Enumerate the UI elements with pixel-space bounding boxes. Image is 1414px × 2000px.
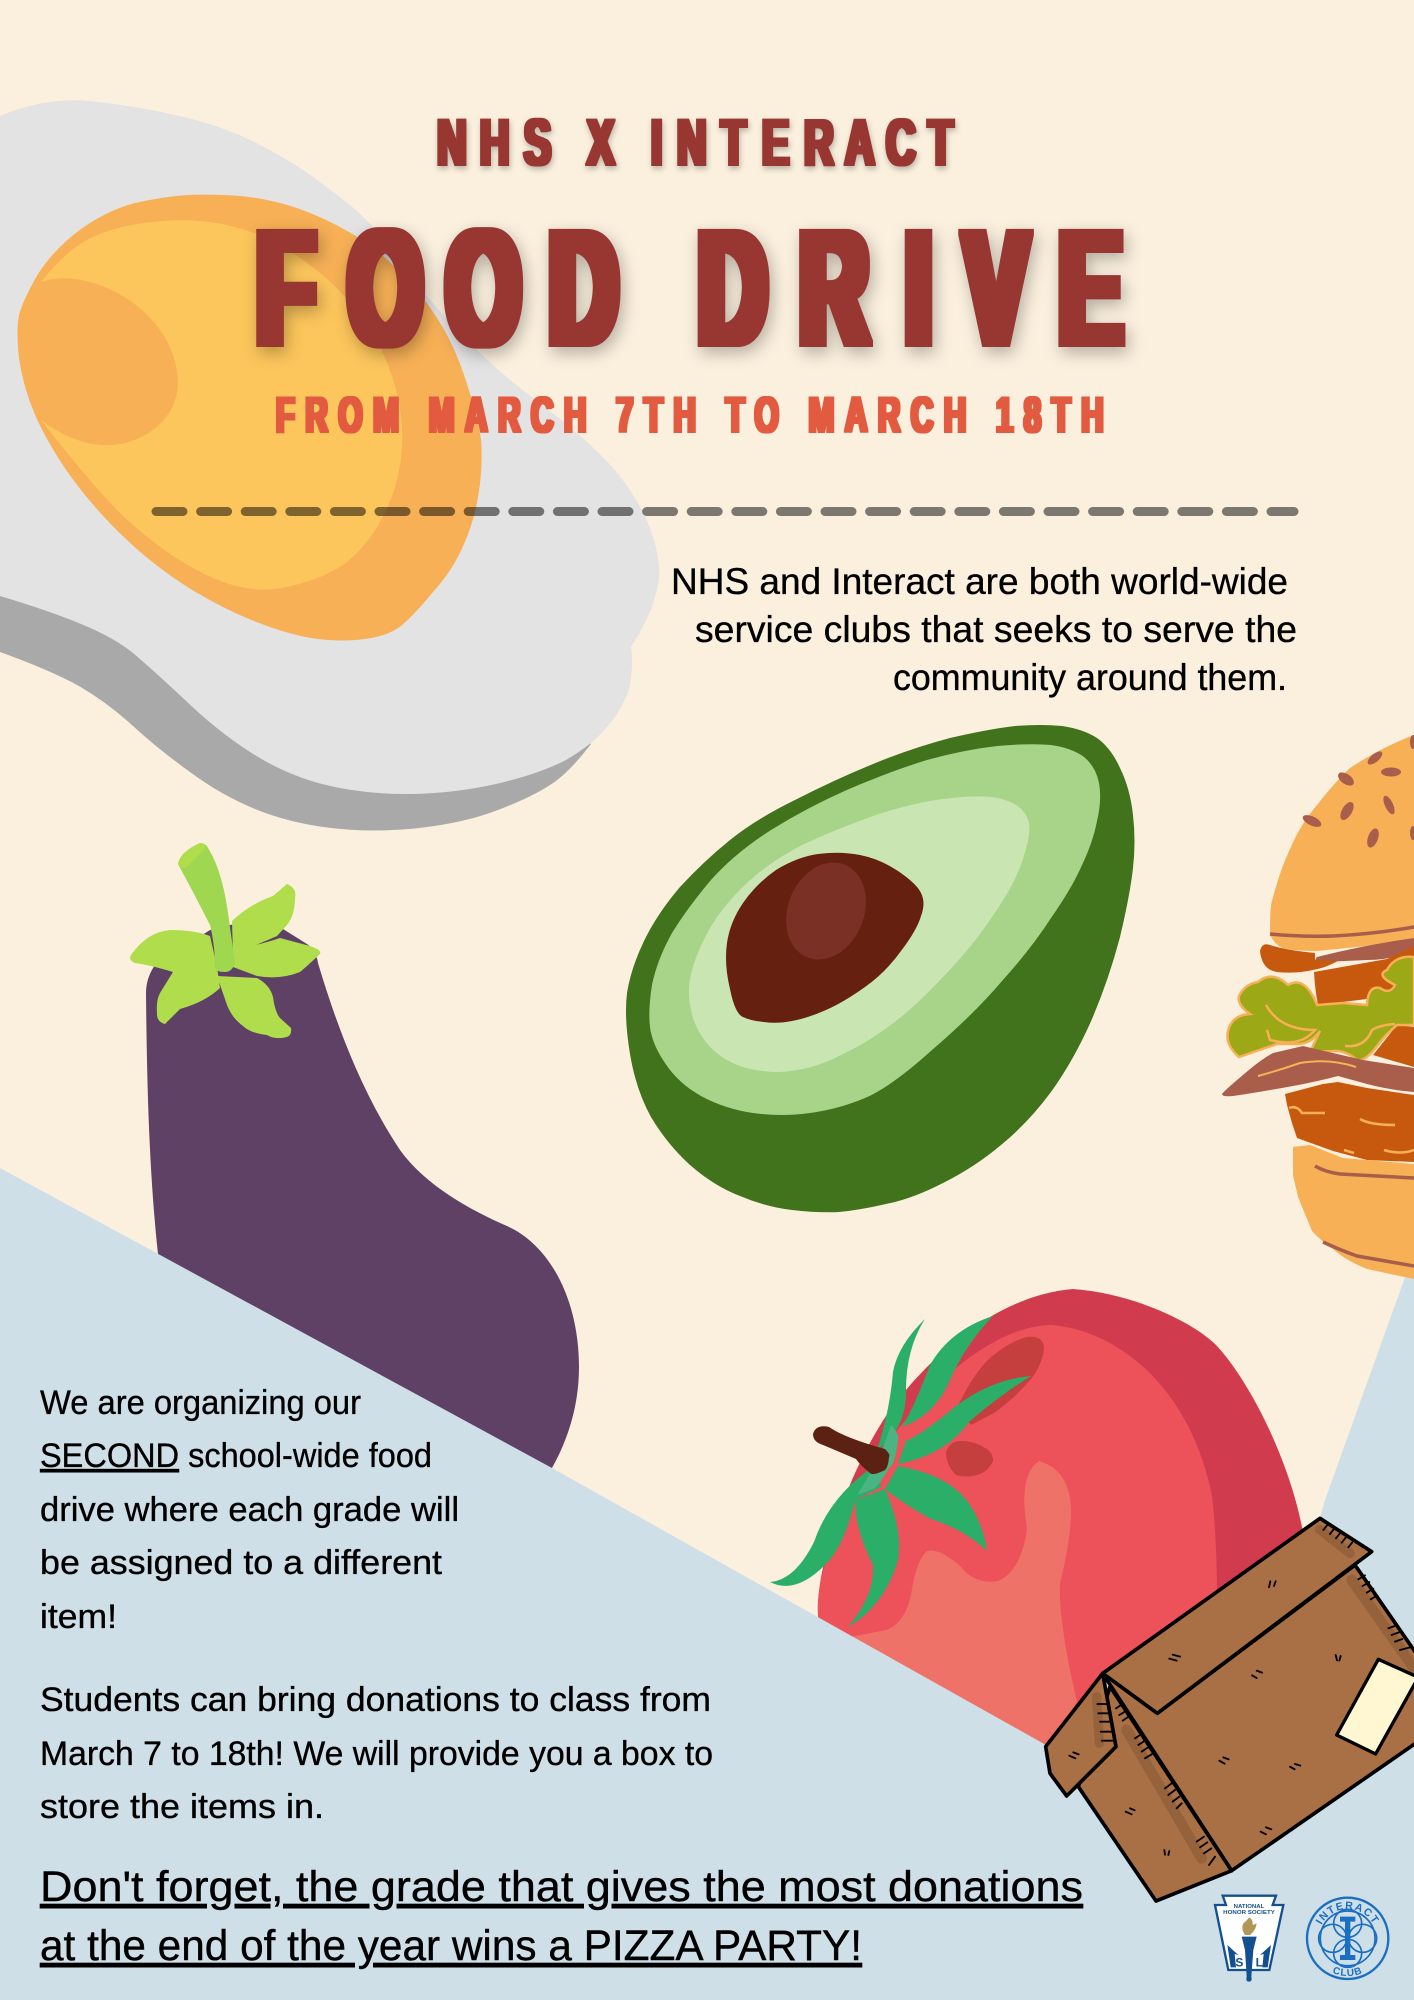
logo: Interact Club: INTERACT [1316, 1902, 1380, 1924]
logo: National Honor Society: NATIONAL [1234, 1904, 1265, 1910]
text block: about the clubs [671, 561, 1297, 698]
text block: about the clubs: NHS and Interact are both world-wide [671, 561, 1288, 602]
text block: about the clubs: community around them. [893, 657, 1287, 698]
logo: Interact Club [1306, 1896, 1390, 1980]
callout: pizza party: Don't forget, the grade that gives the most donations [40, 1863, 1083, 1911]
text block: donations paragraph: store the items in. [40, 1788, 324, 1826]
divider: dashed line [156, 507, 1294, 516]
illustration: avocado [626, 725, 1134, 1212]
illustration: fried egg [0, 100, 659, 831]
illustration: burger [1222, 735, 1414, 1279]
text block: donations paragraph: March 7 to 18th! We will provide you a box to [40, 1735, 713, 1773]
text block: donations paragraph [40, 1681, 713, 1826]
title: Food Drive: FOOD DRIVE [257, 197, 1122, 379]
illustration: cardboard box [1046, 1518, 1414, 1901]
subtitle: dates: FROM MARCH 7TH TO MARCH 18TH [276, 386, 1104, 443]
logo: National Honor Society: HONOR SOCIETY [1223, 1910, 1275, 1916]
text block: about the clubs: service clubs that seeks to serve the [695, 609, 1297, 650]
illustration: eggplant [130, 843, 579, 1490]
text block: organizing paragraph: SECOND school-wide food [40, 1437, 432, 1475]
text block: donations paragraph: Students can bring donations to class from [40, 1681, 711, 1719]
heading: NHS x Interact: NHS X INTERACT [437, 105, 953, 179]
text block: organizing paragraph: We are organizing our [40, 1384, 361, 1422]
logo: Interact Club: CLUB [1333, 1967, 1362, 1976]
text block: organizing paragraph: item! [40, 1598, 117, 1636]
callout: pizza party [40, 1863, 1083, 1970]
panel: blue background wedge [0, 1168, 1414, 2000]
text block: organizing paragraph [40, 1384, 459, 1636]
callout: pizza party: at the end of the year wins a PIZZA PARTY! [40, 1922, 862, 1970]
illustration: tomato [770, 1289, 1305, 1760]
logo: National Honor Society: L [1256, 1956, 1263, 1970]
logo: National Honor Society: S [1235, 1956, 1243, 1970]
text block: organizing paragraph: drive where each grade will [40, 1491, 459, 1529]
logo: National Honor Society [1215, 1896, 1283, 1982]
text block: organizing paragraph: be assigned to a different [40, 1544, 443, 1582]
